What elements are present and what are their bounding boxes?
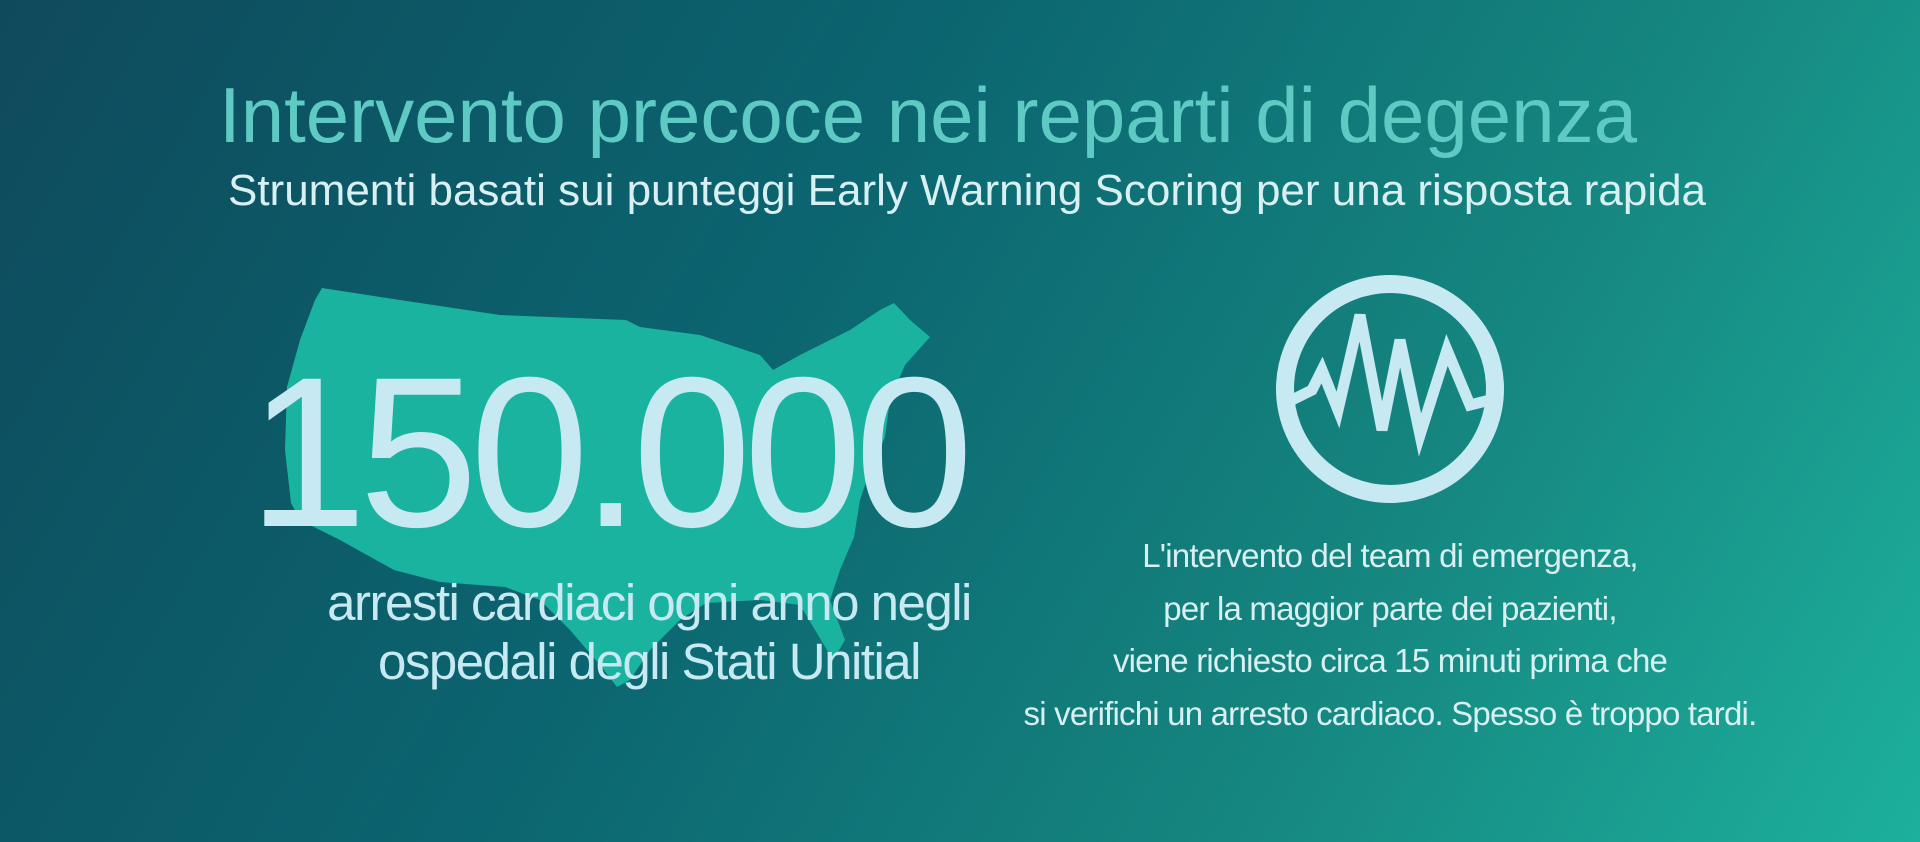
caption: arresti cardiaci ogni anno negli	[327, 574, 971, 631]
icon: heartbeat circle	[1276, 275, 1504, 503]
text: description: viene richiesto circa 15 minuti prima che	[1113, 642, 1667, 679]
title: Intervento precoce nei reparti di degenza	[219, 71, 1637, 159]
caption: ospedali degli Stati Unitial	[378, 633, 920, 690]
map: United States	[285, 288, 930, 687]
subtitle: Strumenti basati sui punteggi Early Warning Scoring per una risposta rapida	[228, 166, 1706, 215]
panel: US statistic	[248, 288, 971, 690]
caption	[327, 574, 971, 690]
big number: 150.000	[248, 333, 966, 572]
text: description: si verifichi un arresto cardiaco. Spesso è troppo tardi.	[1024, 694, 1756, 732]
text: description	[1024, 537, 1756, 732]
text: description: per la maggior parte dei pazienti,	[1163, 590, 1617, 626]
text: description: L'intervento del team di emergenza,	[1142, 537, 1638, 574]
